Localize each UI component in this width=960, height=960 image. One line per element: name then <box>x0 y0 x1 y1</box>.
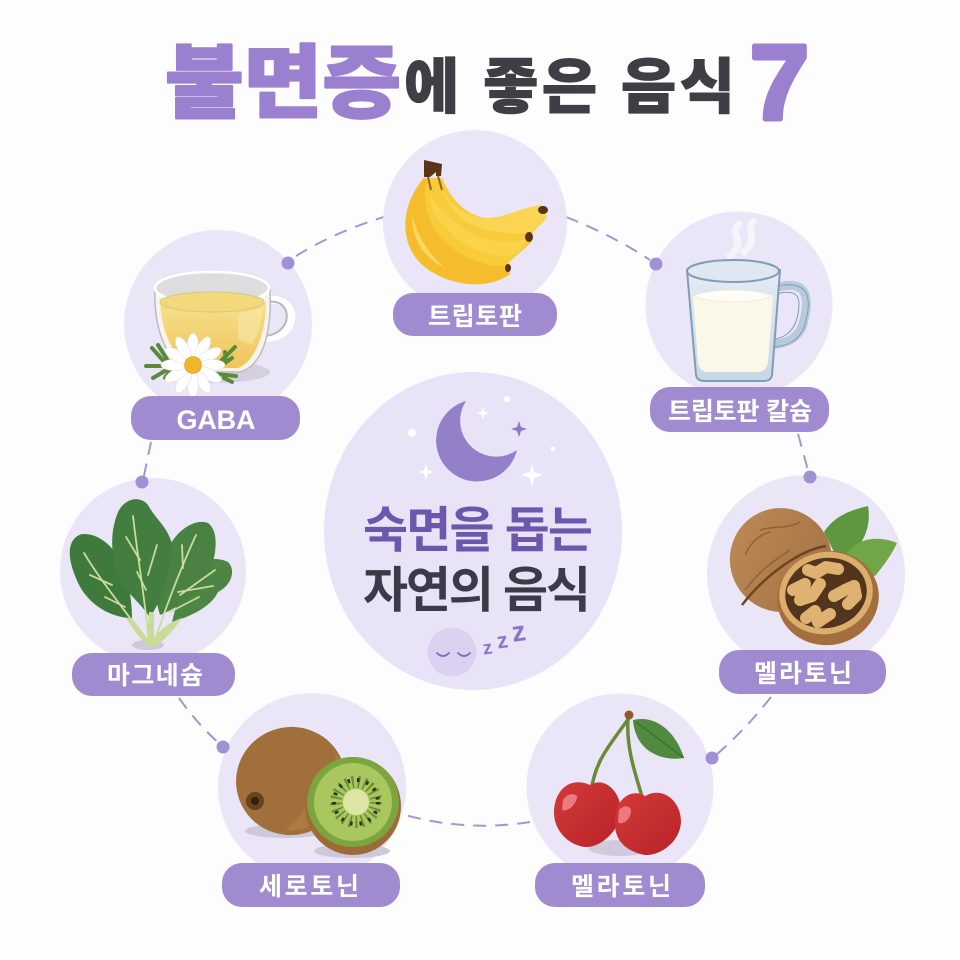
panel: cherry <box>526 694 718 907</box>
icon: halved kiwi <box>305 757 401 858</box>
center heading <box>363 504 593 618</box>
icon: chamomile flower <box>161 333 225 397</box>
icon: zzz: z <box>510 615 528 648</box>
dot <box>804 470 816 484</box>
dot <box>216 740 230 754</box>
title: 에 좋은 음식 <box>404 54 735 121</box>
icon: chamomile leaves <box>146 345 236 382</box>
label: 세로토닌: 세로토닌 <box>259 873 359 901</box>
icon: zzz: z <box>481 637 494 660</box>
icon: chamomile tea <box>146 272 291 397</box>
center heading: 자연의 음식 <box>363 564 591 618</box>
center heading: 숙면을 돕는 <box>363 504 593 558</box>
icon: stars <box>408 396 556 486</box>
icon: zzz <box>481 615 528 660</box>
panel: spinach <box>60 476 246 696</box>
icon: whole kiwi <box>224 715 358 847</box>
dot <box>282 256 294 270</box>
label: 마그네슘 <box>72 653 235 696</box>
label: 트립토판 <box>393 293 557 336</box>
icon: half walnut <box>768 541 888 655</box>
label: 멜라토닌 <box>719 650 886 694</box>
panel: milk <box>646 212 832 432</box>
title <box>165 24 809 142</box>
label: GABA <box>131 396 300 440</box>
dot <box>706 752 718 764</box>
dot <box>136 476 148 488</box>
panel: tea <box>124 230 312 440</box>
icon: sleeping face <box>428 628 476 676</box>
dot <box>650 258 662 270</box>
icon: banana <box>405 160 548 284</box>
label: 멜라토닌: 멜라토닌 <box>754 660 852 688</box>
icon: cherries <box>554 710 684 856</box>
panel: walnut <box>707 470 905 694</box>
icon: whole walnut <box>715 494 847 626</box>
label: GABA: GABA <box>176 405 256 435</box>
label: 세로토닌 <box>222 863 400 907</box>
icon: walnut leaves <box>824 506 897 576</box>
icon: steam <box>730 222 753 256</box>
icon: zzz: z <box>495 627 509 654</box>
title: 불면증 <box>165 39 401 128</box>
icon: spinach <box>70 499 232 650</box>
label: 트립토판: 트립토판 <box>428 303 522 331</box>
panel: center <box>324 372 622 690</box>
label: 멜라토닌 <box>535 863 705 907</box>
icon: moon <box>436 401 517 481</box>
panel: kiwi <box>216 693 406 907</box>
title: 7 <box>750 24 809 142</box>
panel: banana <box>383 130 567 336</box>
label: 마그네슘: 마그네슘 <box>107 662 203 690</box>
icon: glass of milk <box>687 260 808 381</box>
dashed connector ring <box>143 217 809 826</box>
label: 트립토판 칼슘 <box>650 387 829 432</box>
label: 멜라토닌: 멜라토닌 <box>571 873 671 901</box>
label: 트립토판 칼슘: 트립토판 칼슘 <box>668 398 812 426</box>
